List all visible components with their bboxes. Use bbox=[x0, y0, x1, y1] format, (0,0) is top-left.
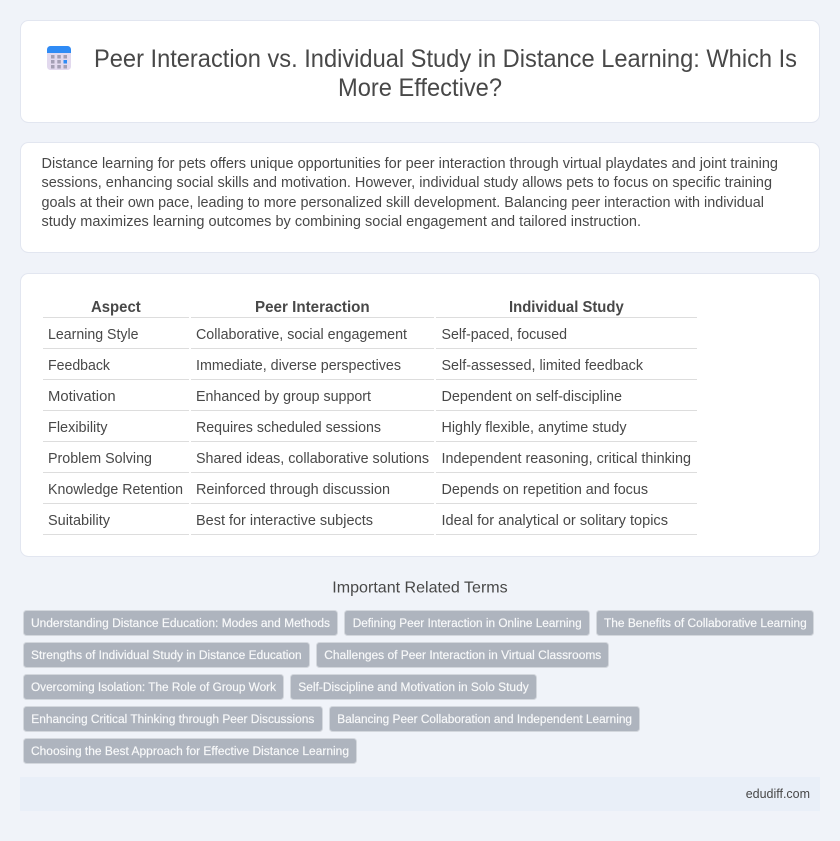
icon: calendar bbox=[47, 46, 71, 70]
row: motivation: Enhanced by group support bbox=[196, 389, 371, 405]
tag bbox=[24, 610, 338, 636]
row: flexibility: Highly flexible, anytime study bbox=[442, 420, 627, 436]
tag: Overcoming Isolation: The Role of Group Work bbox=[31, 680, 277, 694]
tag bbox=[24, 674, 284, 700]
footer site name: edudiff.com bbox=[746, 786, 810, 801]
row: suitability: Suitability bbox=[48, 513, 111, 529]
panel: title card bbox=[20, 20, 820, 122]
tag: Choosing the Best Approach for Effective Distance Learning bbox=[31, 744, 349, 758]
tag bbox=[344, 610, 590, 636]
tag bbox=[316, 642, 608, 668]
footer bar bbox=[20, 777, 820, 811]
row: problem solving: Shared ideas, collaborative solutions bbox=[196, 451, 429, 467]
row: feedback: Self-assessed, limited feedback bbox=[442, 358, 644, 374]
tag: Challenges of Peer Interaction in Virtual Classrooms bbox=[324, 648, 601, 662]
row: suitability: Ideal for analytical or solitary topics bbox=[442, 513, 668, 529]
tag bbox=[290, 674, 536, 700]
tag: Understanding Distance Education: Modes and Methods bbox=[31, 616, 330, 630]
tag bbox=[24, 706, 322, 732]
table header: Individual Study bbox=[509, 299, 624, 316]
title: Peer Interaction vs. Individual Study in Distance Learning: Which Is bbox=[94, 45, 797, 73]
intro paragraph: sessions, enhancing social skills and motivation. However, individual study allows pets to focus on specific training bbox=[42, 175, 772, 191]
tag: The Benefits of Collaborative Learning bbox=[604, 616, 807, 630]
row: suitability: Best for interactive subjects bbox=[196, 513, 373, 529]
row: learning style: Collaborative, social engagement bbox=[196, 327, 407, 343]
table header bbox=[91, 299, 624, 316]
table header: Aspect bbox=[91, 299, 141, 316]
row: flexibility: Flexibility bbox=[48, 420, 108, 436]
tag bbox=[596, 610, 814, 636]
tag: Balancing Peer Collaboration and Independent Learning bbox=[337, 712, 632, 726]
row: knowledge retention bbox=[48, 482, 648, 498]
tag: Enhancing Critical Thinking through Peer Discussions bbox=[31, 712, 314, 726]
row: flexibility bbox=[48, 420, 627, 436]
row: problem solving bbox=[48, 451, 691, 467]
row: knowledge retention: Knowledge Retention bbox=[48, 482, 183, 498]
row: knowledge retention: Depends on repetition and focus bbox=[442, 482, 648, 498]
panel: introduction card bbox=[20, 142, 820, 252]
tag: Defining Peer Interaction in Online Learning bbox=[353, 616, 582, 630]
intro paragraph: goals at their own pace, leading to more personalized skill development. Balancing peer interaction with individual bbox=[42, 195, 764, 211]
intro paragraph: study maximizes learning outcomes by combining social engagement and tailored instruction. bbox=[42, 214, 641, 230]
row: feedback: Feedback bbox=[48, 358, 111, 374]
row: motivation: Motivation bbox=[48, 389, 116, 405]
row: suitability bbox=[48, 513, 668, 529]
intro paragraph: Distance learning for pets offers unique opportunities for peer interaction through virtual playdates and joint training bbox=[42, 156, 778, 172]
tag: Self-Discipline and Motivation in Solo Study bbox=[298, 680, 530, 694]
row: learning style bbox=[48, 327, 567, 343]
tag bbox=[24, 738, 356, 764]
table header: Peer Interaction bbox=[255, 299, 370, 316]
title bbox=[94, 45, 797, 102]
row: feedback: Immediate, diverse perspectives bbox=[196, 358, 401, 374]
row: motivation bbox=[48, 389, 622, 405]
comparison table bbox=[43, 299, 697, 534]
row: flexibility: Requires scheduled sessions bbox=[196, 420, 381, 436]
tag bbox=[24, 642, 310, 668]
intro paragraph bbox=[42, 156, 778, 230]
related term tags bbox=[24, 610, 814, 764]
heading: important related terms: Important Related Terms bbox=[332, 580, 508, 597]
row: knowledge retention: Reinforced through discussion bbox=[196, 482, 390, 498]
tag: Strengths of Individual Study in Distance Education bbox=[31, 648, 302, 662]
row: problem solving: Problem Solving bbox=[48, 451, 152, 467]
title: More Effective? bbox=[338, 74, 502, 102]
row: feedback bbox=[48, 358, 644, 374]
row: learning style: Learning Style bbox=[48, 327, 138, 343]
tag bbox=[330, 706, 640, 732]
panel: comparison table card bbox=[20, 274, 820, 556]
row: motivation: Dependent on self-discipline bbox=[442, 389, 622, 405]
row: learning style: Self-paced, focused bbox=[442, 327, 567, 343]
row: problem solving: Independent reasoning, critical thinking bbox=[442, 451, 691, 467]
